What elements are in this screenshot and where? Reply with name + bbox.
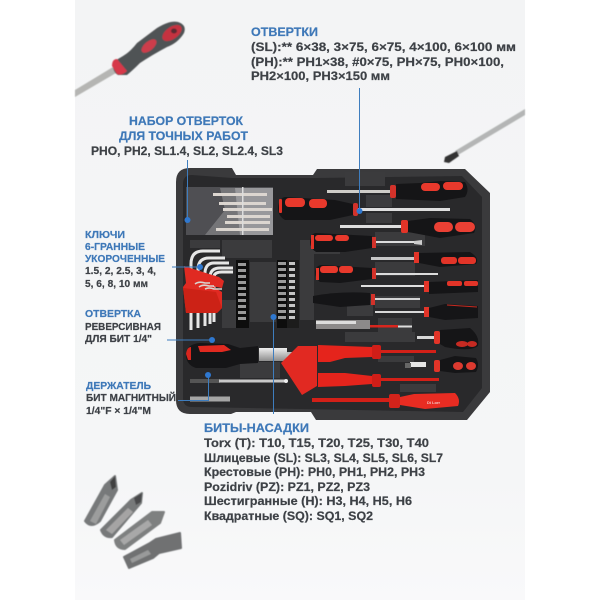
screwdriver 2 [278, 197, 450, 220]
icon: screwdriver tip top right [444, 109, 525, 163]
icon: screwdriver bits [85, 476, 181, 568]
text block: screwdrivers: (PH):** PH1×38, #0×75, PH×75, PH0×100, [251, 55, 504, 69]
text block: bit holder [86, 381, 176, 417]
text block: screwdrivers: ОТВЕРТКИ [251, 25, 318, 39]
text block: bit holder: ДЕРЖАТЕЛЬ [86, 381, 151, 392]
text block: precision set [91, 114, 283, 158]
text block: reversible screwdriver: РЕВЕРСИВНАЯ [85, 322, 161, 333]
screwdriver 7 [361, 280, 478, 294]
hex key set [183, 251, 233, 330]
screwdriver 9 [375, 304, 478, 320]
callout line: screwdrivers [356, 88, 362, 214]
text block: bits: Pozidriv (PZ): PZ1, PZ2, PZ3 [204, 480, 370, 494]
text block: bits: Крестовые (PH): PH0, PH1, PH2, PH3 [204, 465, 425, 479]
text block: hex keys: 1.5, 2, 2.5, 3, 4, [85, 266, 156, 277]
screwdriver 10 [417, 328, 478, 349]
text block: hex keys: УКОРОЧЕННЫЕ [85, 254, 165, 265]
text block: bits: Шлицевые (SL): SL3, SL4, SL5, SL6, SL7 [204, 451, 443, 465]
callout line: bits [270, 314, 276, 414]
screwdriver 12 [405, 356, 478, 373]
screwdriver 1 [327, 181, 468, 201]
text block: screwdrivers [251, 25, 516, 83]
text block: screwdrivers: PH2×100, PH3×150 мм [251, 69, 390, 83]
screwdriver 8 [313, 292, 420, 307]
voltage tester [316, 320, 412, 329]
text block: bit holder: 1/4"F × 1/4"M [86, 406, 151, 417]
red bit adapter holder [281, 346, 317, 395]
text block: bits [204, 421, 443, 523]
text block: reversible screwdriver [85, 309, 161, 345]
callout line: holder [178, 372, 211, 400]
text block: bit holder: БИТ МАГНИТНЫЙ [86, 391, 176, 404]
text block: hex keys [85, 230, 165, 290]
icon: large screwdriver top left [75, 22, 185, 97]
text block: bits: Квадратные (SQ): SQ1, SQ2 [204, 509, 373, 523]
ratchet screwdriver [186, 343, 300, 368]
precision screwdriver set [186, 187, 273, 235]
red screwdriver 13 [318, 373, 439, 387]
screwdriver 5 [371, 252, 477, 267]
text block: precision set: ДЛЯ ТОЧНЫХ РАБОТ [119, 129, 249, 143]
screwdriver 4 [310, 233, 422, 252]
text block: hex keys: 5, 6, 8, 10 мм [85, 279, 148, 290]
text block: bits: Шестигранные (H): H3, H4, H5, H6 [204, 494, 412, 508]
text block: hex keys: 6-ГРАННЫЕ [85, 242, 145, 253]
background panel [75, 0, 525, 600]
callout line: precision set [184, 160, 190, 223]
text block: reversible screwdriver: ДЛЯ БИТ 1/4" [85, 334, 152, 345]
red screwdriver 11 [318, 345, 436, 362]
red screwdriver 14: Di Lorr [427, 400, 441, 405]
magnetic bit holder [190, 379, 288, 402]
text block: precision set: PHO, PH2, SL1.4, SL2, SL2.4, SL3 [91, 144, 283, 158]
callout line: hex keys [172, 264, 203, 270]
foam tray recesses [190, 172, 436, 392]
bit holders [236, 260, 299, 328]
text block: precision set: НАБОР ОТВЕРТОК [129, 114, 244, 128]
tool tray [176, 168, 490, 420]
red screwdriver 14 [312, 393, 459, 409]
screwdriver 3 [340, 218, 475, 238]
callout line: ratchet [167, 337, 215, 343]
text block: reversible screwdriver: ОТВЕРТКА [85, 309, 141, 320]
text block: bits: БИТЫ-НАСАДКИ [204, 421, 309, 435]
text block: bits: Torx (T): T10, T15, T20, T25, T30, T40 [204, 436, 429, 450]
text block: screwdrivers: (SL):** 6×38, 3×75, 6×75, 4×100, 6×100 мм [251, 40, 516, 54]
screwdriver 6 [315, 265, 438, 283]
screwdrivers [278, 181, 478, 409]
text block: hex keys: КЛЮЧИ [85, 230, 125, 241]
